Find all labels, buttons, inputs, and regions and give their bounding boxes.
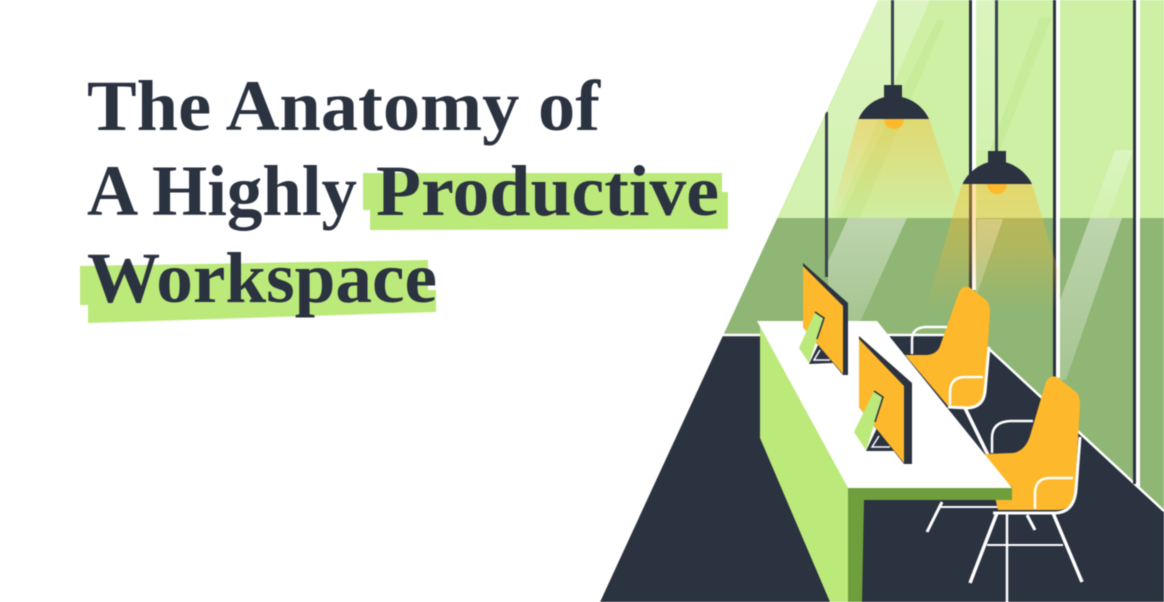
title line 1: The Anatomy of	[87, 66, 601, 146]
light rays	[828, 218, 1122, 380]
monitor 1 stand	[799, 312, 824, 363]
desk	[757, 321, 1012, 602]
monitor 2 stand	[854, 391, 883, 450]
desk top	[757, 321, 1012, 488]
chair 2 seat	[985, 376, 1080, 510]
floor	[600, 336, 1164, 602]
monitor 1	[799, 263, 848, 375]
upper wall light bands	[780, 0, 1133, 218]
chair 2	[970, 376, 1082, 602]
monitor 2 back	[859, 336, 912, 464]
window posts	[825, 0, 1140, 487]
highlighted word: Productive: Productive	[376, 151, 719, 231]
highlight: Workspace	[80, 260, 436, 323]
highlight: Productive	[363, 173, 728, 230]
workspace illustration	[600, 0, 1164, 602]
title	[80, 66, 728, 323]
desk side panel	[759, 327, 849, 602]
title line 2: A Highly	[87, 151, 357, 231]
monitor 1 back	[803, 263, 848, 375]
chair 1	[905, 287, 1035, 532]
monitor 1 stand base	[809, 345, 833, 364]
floor edge lines	[722, 335, 1164, 511]
chair 1 seat	[905, 287, 990, 407]
monitor 2 stand base	[866, 428, 895, 451]
lamp 2	[925, 0, 1058, 310]
lower wall	[600, 218, 1164, 518]
upper wall	[777, 0, 1164, 218]
lamp 1	[834, 0, 956, 210]
desk leg and front edge	[848, 486, 1012, 602]
light cone 2	[931, 184, 1058, 301]
light cone 1	[834, 118, 956, 210]
highlighted word: Workspace: Workspace	[87, 238, 437, 318]
monitor 2	[854, 336, 912, 464]
